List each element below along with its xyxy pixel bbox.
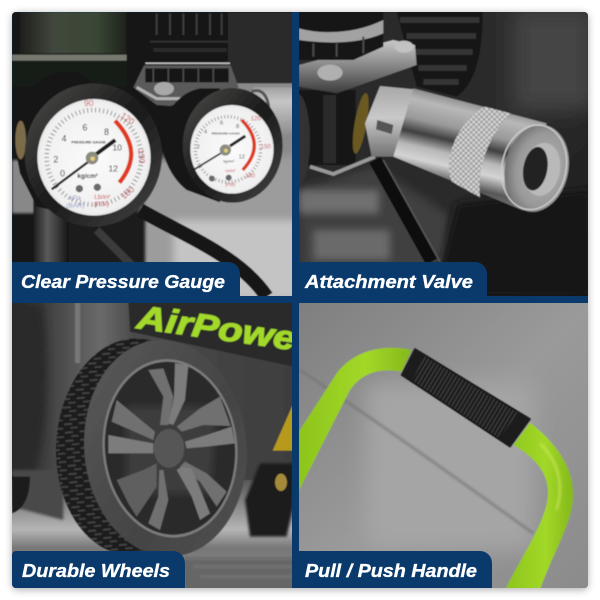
black grip: [402, 349, 530, 447]
background wall: [226, 12, 292, 84]
large gauge numbers: PRESSURE GAUGE: [71, 140, 106, 144]
small gauge numbers: PRESSURE GAUGE: [212, 132, 240, 136]
large gauge numbers: Lb/in²: [94, 194, 110, 201]
large gauge numbers: (BAR): [66, 202, 84, 209]
panel: durable wheels: [12, 303, 292, 588]
wheel tread: [56, 338, 151, 551]
small gauge housing: [162, 88, 220, 202]
wheel face: [84, 341, 246, 556]
label: durable wheels: [12, 551, 185, 588]
small gauge numbers: [197, 117, 271, 187]
label: attachment valve: Attachment Valve: [304, 272, 473, 292]
small gauge numbers: 120: [251, 117, 261, 123]
green tube left: [297, 348, 412, 495]
small gauge numbers: 4: [204, 129, 207, 135]
brass thread: [352, 92, 370, 154]
valve nut: [365, 86, 415, 157]
pressure gauge photo: [12, 12, 300, 303]
panel: attachment valve: [285, 10, 593, 298]
large gauge numbers: kg/cm²: [77, 173, 98, 180]
large gauge numbers: 10: [112, 143, 122, 153]
large gauge numbers: [53, 98, 147, 209]
small gauge numbers: (PSI): [225, 182, 236, 187]
airpower logo: AirPower: [134, 299, 316, 361]
small gauge numbers: 150: [261, 144, 271, 150]
large gauge numbers: 6: [82, 123, 87, 133]
large gauge bezel: [25, 83, 162, 227]
small gauge numbers: 180: [245, 173, 256, 179]
small gauge numbers: 12: [239, 155, 245, 161]
large gauge numbers: (PSI): [94, 201, 109, 208]
small gauge bezel: [183, 88, 283, 203]
large gauge numbers: 8: [104, 127, 109, 137]
label: clear pressure gauge: Clear Pressure Gauge: [21, 272, 225, 292]
valve face: [504, 125, 570, 213]
large gauge housing: [17, 158, 48, 210]
wheel hub: [154, 429, 184, 468]
warning triangle: [273, 403, 293, 451]
small gauge numbers: 6: [220, 121, 223, 127]
large gauge numbers: 0: [60, 169, 65, 179]
label: clear pressure gauge: [12, 262, 240, 296]
valve body: [393, 88, 547, 211]
small gauge numbers: kg/cm²: [223, 160, 235, 164]
green tube right: [504, 423, 573, 592]
label: durable wheels: Durable Wheels: [22, 561, 170, 581]
regulator bracket: [133, 65, 239, 106]
knurled band: [449, 107, 511, 197]
attachment valve photo: [285, 10, 593, 298]
regulator knob: [220, 12, 228, 62]
small gauge numbers: 2: [197, 145, 200, 151]
small gauge numbers: 8: [236, 124, 239, 130]
compressor ribs: [397, 12, 483, 97]
panel: clear pressure gauge: [12, 12, 300, 303]
wheel spokes: [108, 363, 235, 530]
large gauge numbers: 4: [62, 134, 67, 144]
large gauge numbers: 180: [119, 184, 136, 201]
large gauge numbers: kPa: [69, 195, 81, 202]
bracket block: [299, 90, 356, 165]
large gauge numbers: 120: [119, 110, 137, 127]
hose: [375, 160, 432, 262]
panel: pull / push handle: [297, 302, 592, 592]
label: pull / push handle: [299, 551, 492, 588]
label: attachment valve: [299, 262, 487, 296]
large gauge numbers: 12: [108, 164, 118, 174]
handle photo: [297, 302, 592, 592]
large gauge numbers: 90: [84, 98, 94, 108]
wheel photo: [12, 303, 292, 588]
small gauge numbers: Lb/in²: [225, 168, 236, 173]
label: pull / push handle: Pull / Push Handle: [305, 561, 477, 581]
large gauge numbers: 150: [136, 149, 147, 164]
rear foot: [245, 463, 293, 537]
large gauge numbers: 2: [53, 155, 58, 165]
